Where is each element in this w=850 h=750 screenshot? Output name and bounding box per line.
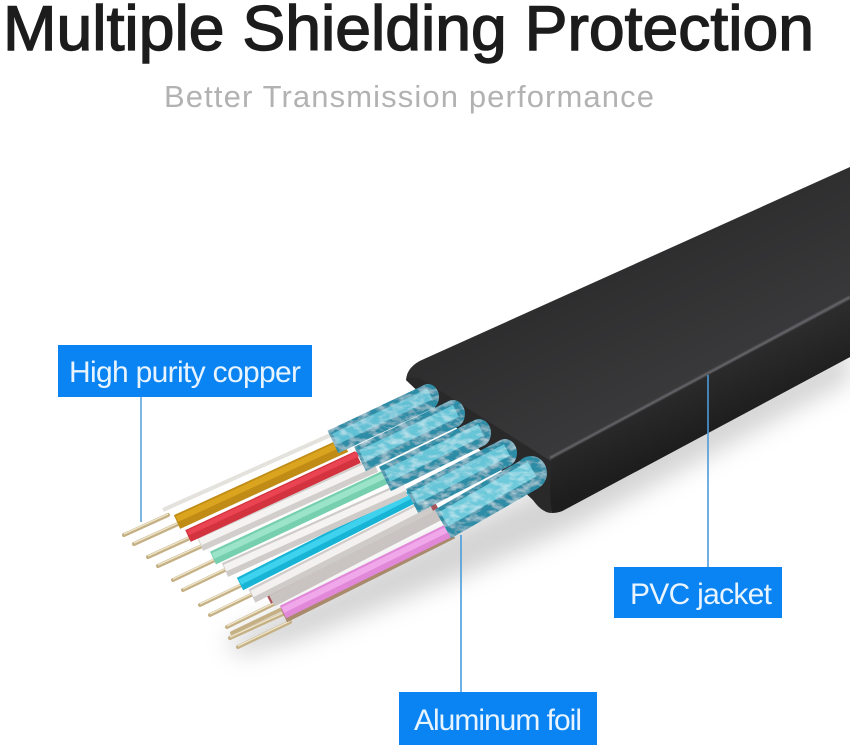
label: high purity copper bbox=[58, 345, 312, 397]
jacket edge highlight bbox=[550, 297, 850, 458]
wire: white 3 bbox=[252, 503, 430, 596]
foil 1 bbox=[333, 384, 439, 442]
coloured wires bbox=[163, 433, 452, 616]
label: aluminum foil: Aluminum foil bbox=[414, 704, 582, 737]
jacket side bbox=[546, 300, 850, 513]
foil 5 bbox=[443, 456, 547, 524]
foil 3 bbox=[385, 419, 491, 479]
label: PVC jacket bbox=[614, 567, 782, 618]
label: high purity copper: High purity copper bbox=[69, 356, 301, 389]
jacket front face bbox=[406, 377, 552, 513]
copper pin highlights bbox=[124, 514, 290, 646]
label: PVC jacket: PVC jacket bbox=[630, 578, 773, 611]
foil 2 bbox=[360, 400, 465, 459]
wire: pink bbox=[283, 527, 452, 616]
copper pins bbox=[124, 515, 290, 647]
wire: grey with red trace bbox=[268, 508, 440, 601]
wire: green bbox=[213, 473, 390, 558]
label: aluminum foil bbox=[399, 692, 597, 745]
wire: red bbox=[188, 454, 358, 536]
foil 4 bbox=[412, 439, 517, 501]
leader line: aluminum foil bbox=[460, 535, 462, 692]
wire: orange bbox=[163, 433, 345, 522]
jacket body bbox=[406, 167, 850, 511]
wire: blue bbox=[240, 491, 420, 584]
leader line: high purity copper bbox=[140, 397, 142, 522]
cable shadow bbox=[225, 345, 850, 655]
wire: white 1 bbox=[200, 463, 375, 544]
leader line: PVC jacket bbox=[707, 375, 709, 567]
flat cable PVC jacket bbox=[406, 167, 850, 513]
aluminum foil shields bbox=[333, 384, 547, 524]
wire: white 2 bbox=[225, 487, 405, 570]
subtitle: Better Transmission performance bbox=[164, 79, 654, 114]
